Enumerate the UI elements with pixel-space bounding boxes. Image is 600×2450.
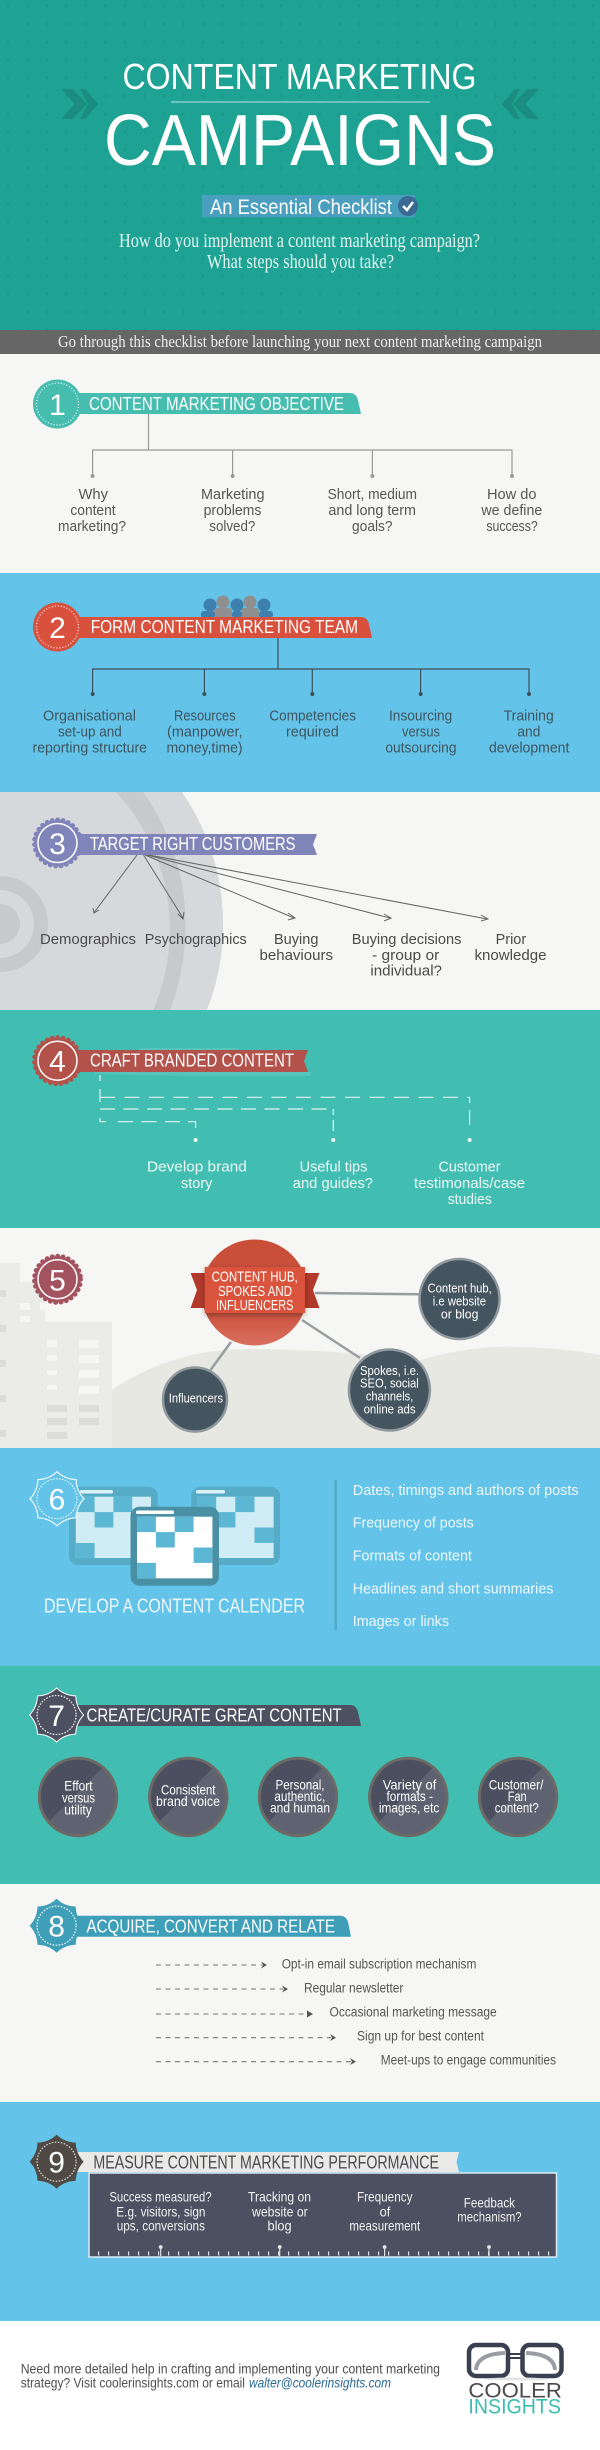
hub label: INFLUENCERS: [216, 1297, 294, 1314]
circle: personal: authentic,: [274, 1788, 325, 1804]
text items: solved?: [209, 518, 255, 535]
text items: - group or: [372, 947, 439, 964]
text items: goals?: [352, 518, 393, 535]
hub label: CONTENT HUB,: [212, 1269, 298, 1286]
text items: Prior: [496, 931, 526, 948]
number badge 5: [34, 1256, 80, 1302]
number badge 1: [33, 380, 82, 428]
text items: [58, 486, 542, 535]
number badge 2: [33, 602, 82, 652]
panel: step 9: [0, 2102, 600, 2321]
circle: effort: [39, 1758, 117, 1836]
panel: step 3: [0, 792, 600, 1010]
panel: step 8: [0, 1884, 600, 2102]
text items: Demographics: [40, 931, 136, 948]
text items: required: [286, 724, 339, 741]
icon: team people: [201, 596, 273, 618]
text items: and guides?: [293, 1175, 373, 1192]
text items: Insourcing: [389, 708, 452, 725]
text items: [282, 1956, 556, 2068]
panel text: ups, conversions: [117, 2218, 205, 2234]
text items: Psychographics: [145, 931, 247, 948]
logo: cooler insights wordmark: INSIGHTS: [468, 2395, 561, 2418]
dashed connectors: [100, 1075, 470, 1131]
calendar title: DEVELOP A CONTENT CALENDER: [44, 1596, 305, 1618]
icon: check: [398, 196, 418, 216]
heading ribbon: CRAFT BRANDED CONTENT: [90, 1051, 294, 1071]
heading ribbon: FORM CONTENT MARKETING TEAM: [91, 617, 358, 637]
number badge 7: 7: [48, 1700, 65, 1733]
circle: effort: utility: [64, 1801, 92, 1817]
circle: customer: Fan: [508, 1788, 527, 1804]
ruler panel: [89, 2173, 556, 2257]
panel: step 1: [0, 354, 600, 573]
panel text: website or: [251, 2203, 308, 2219]
tree lines: [93, 638, 529, 694]
brush streak behind ribbon: [95, 1048, 312, 1076]
title divider: [171, 102, 430, 103]
circle: effort: versus: [62, 1790, 95, 1806]
text items: Competencies: [269, 708, 356, 725]
text items: Develop brand: [147, 1159, 247, 1176]
connector dots: [91, 692, 531, 696]
text items: Occasional marketing message: [330, 2005, 497, 2020]
text items: Opt-in email subscription mechanism: [282, 1956, 476, 1971]
circle: brand voice: brand voice: [156, 1793, 220, 1809]
circle: content hub: or blog: [441, 1306, 478, 1321]
circle: personal: Personal,: [276, 1776, 324, 1792]
number badge 3: [34, 820, 80, 866]
text items: development: [489, 740, 570, 757]
number badge 4: 4: [49, 1046, 66, 1079]
list: Images or links: [353, 1613, 449, 1630]
circle: influencers: [163, 1368, 227, 1432]
panel text: measurement: [349, 2218, 420, 2234]
icon: back right calendar: [191, 1487, 280, 1565]
list: Formats of content: [353, 1548, 473, 1565]
text items: Buying: [274, 931, 318, 948]
subtitle badge: An Essential Checklist: [210, 196, 392, 219]
ruler pins: [159, 2245, 491, 2256]
number badge 4: [34, 1038, 80, 1084]
background hills: [112, 1347, 600, 1448]
panel text: Frequency: [357, 2189, 412, 2205]
dashed arrows: [156, 1965, 351, 2062]
text items: How do: [487, 486, 536, 503]
circle: personal: and human: [270, 1799, 330, 1815]
circle: customer: [479, 1758, 557, 1836]
footer text: [21, 2360, 440, 2391]
text items: versus: [402, 724, 440, 741]
number badge 9: 9: [48, 2147, 65, 2180]
text items: story: [181, 1175, 213, 1192]
panel text: of: [380, 2203, 390, 2219]
footer text: Need more detailed help in crafting and implementing your content marketing: [21, 2360, 440, 2376]
text items: Training: [504, 708, 554, 725]
heading ribbon: CREATE/CURATE GREAT CONTENT: [86, 1706, 342, 1726]
text items: outsourcing: [385, 740, 456, 757]
panel text: Success measured?: [109, 2189, 212, 2205]
ribbon front: [205, 1267, 305, 1313]
text items: individual?: [370, 963, 442, 980]
text items: reporting structure: [32, 740, 147, 757]
logo: cooler insights wordmark: [468, 2379, 562, 2418]
number badge 8: 8: [48, 1911, 65, 1944]
text items: Why: [78, 486, 108, 503]
ruler ticks: [98, 2252, 552, 2256]
text items: (manpower,: [167, 724, 243, 741]
panel text: mechanism?: [457, 2209, 522, 2225]
number badge 2: 2: [49, 612, 66, 645]
panel: header: [0, 0, 600, 331]
panel: step 6: [0, 1448, 600, 1666]
panel: step 2: [0, 573, 600, 792]
circle: spokes: [349, 1350, 430, 1430]
intro question text: [119, 230, 480, 273]
text items: set-up and: [58, 724, 122, 741]
text items: studies: [448, 1191, 492, 1208]
heading ribbon: MEASURE CONTENT MARKETING PERFORMANCE: [93, 2152, 439, 2172]
text items: Meet-ups to engage communities: [381, 2053, 556, 2068]
panel: step 4: [0, 1010, 600, 1228]
text items: marketing?: [58, 518, 126, 535]
circle: customer: content?: [495, 1799, 539, 1815]
hub label: [212, 1269, 298, 1314]
circle: brand voice: [150, 1758, 227, 1836]
logo: glasses: [469, 2345, 562, 2380]
number badge 6: [30, 1472, 84, 1526]
number badge 3: 3: [49, 828, 66, 861]
text items: knowledge: [474, 947, 546, 964]
circle: influencers: Influencers: [169, 1391, 223, 1406]
list: [353, 1482, 579, 1630]
icon: front calendar: [130, 1507, 219, 1586]
ribbon tails: [191, 1273, 320, 1308]
circle: spokes: online ads: [364, 1401, 416, 1416]
text items: Buying decisions: [352, 931, 462, 948]
list: Frequency of posts: [353, 1515, 474, 1532]
list: Dates, timings and authors of posts: [353, 1482, 579, 1499]
text items: testimonals/case: [414, 1175, 525, 1192]
circle: spokes: SEO, social: [360, 1376, 419, 1391]
circle: customer: Customer/: [489, 1776, 543, 1792]
text items: Marketing: [201, 486, 264, 503]
circle: variety: [370, 1758, 447, 1836]
heading ribbon: TARGET RIGHT CUSTOMERS: [90, 834, 295, 854]
circle: content hub: Content hub,: [428, 1281, 492, 1296]
title: content marketing: CONTENT MARKETING: [122, 56, 476, 97]
circle: content hub: [420, 1259, 500, 1339]
circle: effort: Effort: [64, 1778, 93, 1794]
text items: we define: [480, 502, 542, 519]
circle: brand voice: Consistent: [161, 1781, 216, 1797]
footer text: strategy? Visit coolerinsights.com or email: [21, 2375, 245, 2391]
panel: step 7: [0, 1666, 600, 1884]
background target circles: [0, 792, 223, 1010]
circle: spokes: Spokes, i.e.: [360, 1363, 419, 1378]
footer text: walter@coolerinsights.com: [249, 2375, 391, 2391]
circle: variety: formats -: [386, 1788, 433, 1804]
logo: cooler insights wordmark: COOLER: [468, 2379, 562, 2402]
number badge 8: [30, 1899, 84, 1953]
number badge 1: 1: [49, 389, 66, 422]
grey checklist bar: Go through this checklist before launching your next content marketing campaign: [58, 332, 542, 351]
intro question text: What steps should you take?: [207, 251, 394, 273]
panel text: Feedback: [464, 2194, 516, 2210]
panel text: Tracking on: [248, 2189, 311, 2205]
text items: Organisational: [43, 708, 136, 725]
text items: problems: [204, 502, 261, 519]
circle: spokes: channels,: [366, 1389, 413, 1404]
text items: Useful tips: [300, 1159, 367, 1176]
icon: back left calendar: [69, 1487, 158, 1565]
connector lines: [210, 1293, 419, 1370]
panel text: blog: [268, 2218, 292, 2234]
panel: step 5: [0, 1228, 600, 1448]
panel: footer: [0, 2321, 600, 2450]
text items: behaviours: [260, 947, 333, 964]
list: Headlines and short summaries: [353, 1580, 553, 1597]
panel text: E.g. visitors, sign: [116, 2203, 206, 2219]
divider: [334, 1480, 337, 1630]
hub label: SPOKES AND: [218, 1283, 292, 1300]
main hub circle: [191, 1240, 320, 1346]
icon: left chevrons: [61, 89, 98, 119]
text items: success?: [486, 518, 538, 535]
circle: personal: [259, 1758, 337, 1836]
background buildings: [0, 1263, 112, 1448]
text items: content: [70, 502, 116, 519]
text items: [32, 708, 570, 757]
text items: and: [517, 724, 540, 741]
text items: Sign up for best content: [357, 2029, 484, 2044]
intro question text: How do you implement a content marketing campaign?: [119, 230, 480, 252]
number badge 9: [30, 2135, 84, 2189]
tree lines: [93, 414, 512, 476]
number badge 5: 5: [49, 1264, 66, 1297]
connector dots: [91, 474, 514, 478]
text items: Resources: [174, 708, 236, 725]
text items: Regular newsletter: [304, 1981, 404, 1996]
circle: content hub: i.e website: [433, 1293, 486, 1308]
text items: [40, 931, 546, 980]
connector dots: [194, 1138, 472, 1142]
text items: and long term: [328, 502, 416, 519]
title: campaigns: CAMPAIGNS: [104, 101, 496, 181]
text items: Customer: [438, 1159, 500, 1176]
text items: Short, medium: [328, 486, 417, 503]
arrow heads: [261, 1962, 356, 2065]
circle: variety: images, etc: [379, 1799, 439, 1815]
arrows: [93, 855, 488, 921]
text items: [147, 1159, 525, 1208]
number badge 6: 6: [49, 1484, 65, 1517]
heading ribbon: CONTENT MARKETING OBJECTIVE: [89, 394, 344, 414]
icon: right chevrons: [502, 89, 539, 119]
circle: variety: Variety of: [383, 1776, 436, 1792]
text items: money,time): [166, 740, 243, 757]
heading ribbon: ACQUIRE, CONVERT AND RELATE: [86, 1917, 335, 1937]
number badge 7: [30, 1688, 84, 1742]
panel text: [109, 2189, 522, 2234]
